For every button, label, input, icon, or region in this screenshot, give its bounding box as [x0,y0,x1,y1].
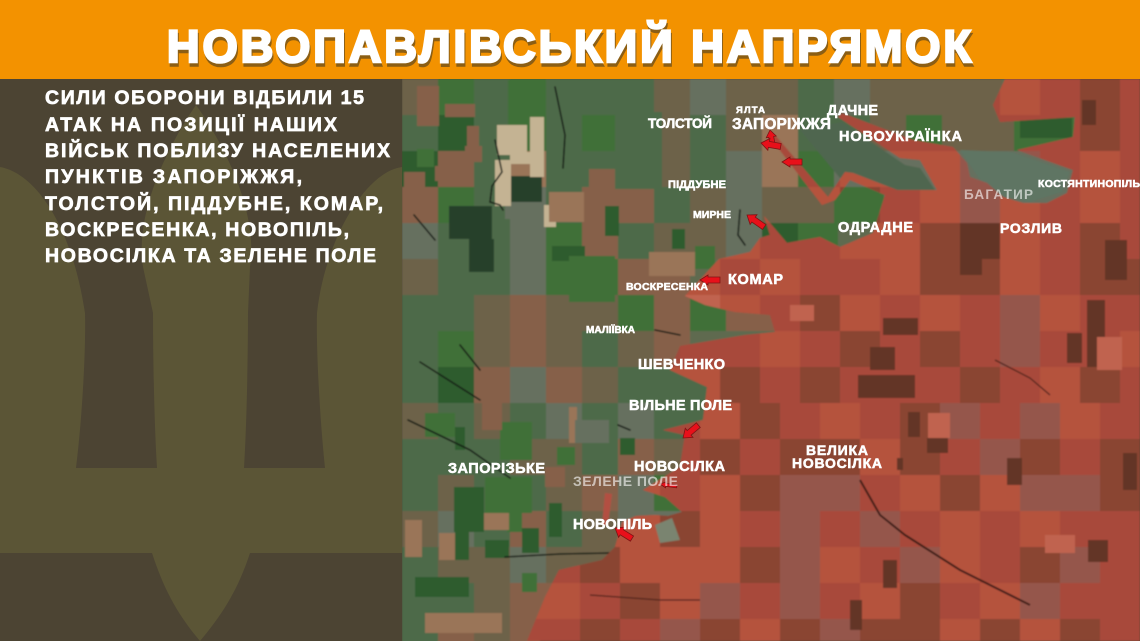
thin red strip near Novopil [602,493,612,525]
label: Zaporizhzhia: ЗАПОРІЖЖЯ [732,116,831,133]
red occupied territory fields [520,79,1140,641]
label: Shevchenko: ШЕВЧЕНКО [638,357,725,373]
left panel background [0,79,402,641]
trident watermark [0,105,402,641]
label: Vilne Pole: ВІЛЬНЕ ПОЛЕ [629,398,732,414]
header bar [0,0,1140,79]
text block: summary: НОВОСІЛКА ТА ЗЕЛЕНЕ ПОЛЕ [45,245,376,267]
text block: summary: ВІЙСЬК ПОБЛИЗУ НАСЕЛЕНИХ [45,138,390,162]
label: Rozlyv: РОЗЛИВ [1000,220,1062,236]
label: Novosilka: НОВОСІЛКА [634,459,726,475]
satellite map [402,79,1140,641]
label: Zelene Pole: ЗЕЛЕНЕ ПОЛЕ [573,473,678,489]
label: Novoukrainka: НОВОУКРАЇНКА [839,128,963,145]
label: Kostiantynopil: КОСТЯНТИНОПІЛЬ [1038,178,1140,190]
label: Novopil: НОВОПІЛЬ [573,517,652,533]
label: Voskresenka: ВОСКРЕСЕНКА [626,281,708,293]
arrow: Voskresenka [700,275,720,285]
arrow: Zelene Pole [660,481,677,489]
label: Myrne: МИРНЕ [693,209,731,221]
label: Piddubne: ПІДДУБНЕ [668,179,726,191]
title: НОВОПАВЛІВСЬКИЙ НАПРЯМОК [168,24,973,76]
river gullies: free territory [408,87,745,557]
arrow: east of Zaporizhzhia [782,157,802,167]
label: Komar: КОМАР [728,272,783,288]
text block: summary: АТАК НА ПОЗИЦІЇ НАШИХ [45,113,337,136]
forest notch and valley shades [800,122,935,190]
field patchwork: free territory [402,79,1084,641]
label: Bahatyr: БАГАТИР [964,187,1033,202]
arrow: Myrne [744,210,768,232]
label: Velyka Novosilka [792,442,882,471]
label: Yalta: ЯЛТА [736,105,765,116]
text block: summary: ВОСКРЕСЕНКА, НОВОПІЛЬ, [45,219,349,241]
text block: summary: ПУНКТІВ ЗАПОРІЖЖЯ, [45,166,302,188]
label: Velyka Novosilka: НОВОСІЛКА [792,455,882,471]
label: Tolstoi: ТОЛСТОЙ [648,116,712,131]
arrow: Vilne Pole [679,421,702,443]
arrow: Yalta up [765,129,777,145]
text block: summary [45,87,390,267]
title: НОВОПАВЛІВСЬКИЙ НАПРЯМОК [167,21,972,72]
arrow: Novopil [612,523,635,544]
text block: summary: СИЛИ ОБОРОНИ ВІДБИЛИ 15 [45,87,364,109]
text block: summary: ТОЛСТОЙ, ПІДДУБНЕ, КОМАР, [45,191,383,215]
label: Velyka Novosilka: ВЕЛИКА [806,442,868,458]
arrow: Zaporizhzhia [760,137,782,152]
label: Dachne: ДАЧНЕ [827,103,878,119]
gray field inside the front near Novopil [655,518,680,543]
label: Zaporizke: ЗАПОРІЗЬКЕ [448,461,545,477]
label: Maliivka: МАЛІЇВКА [586,323,635,336]
label: Odradne: ОДРАДНЕ [838,220,913,236]
